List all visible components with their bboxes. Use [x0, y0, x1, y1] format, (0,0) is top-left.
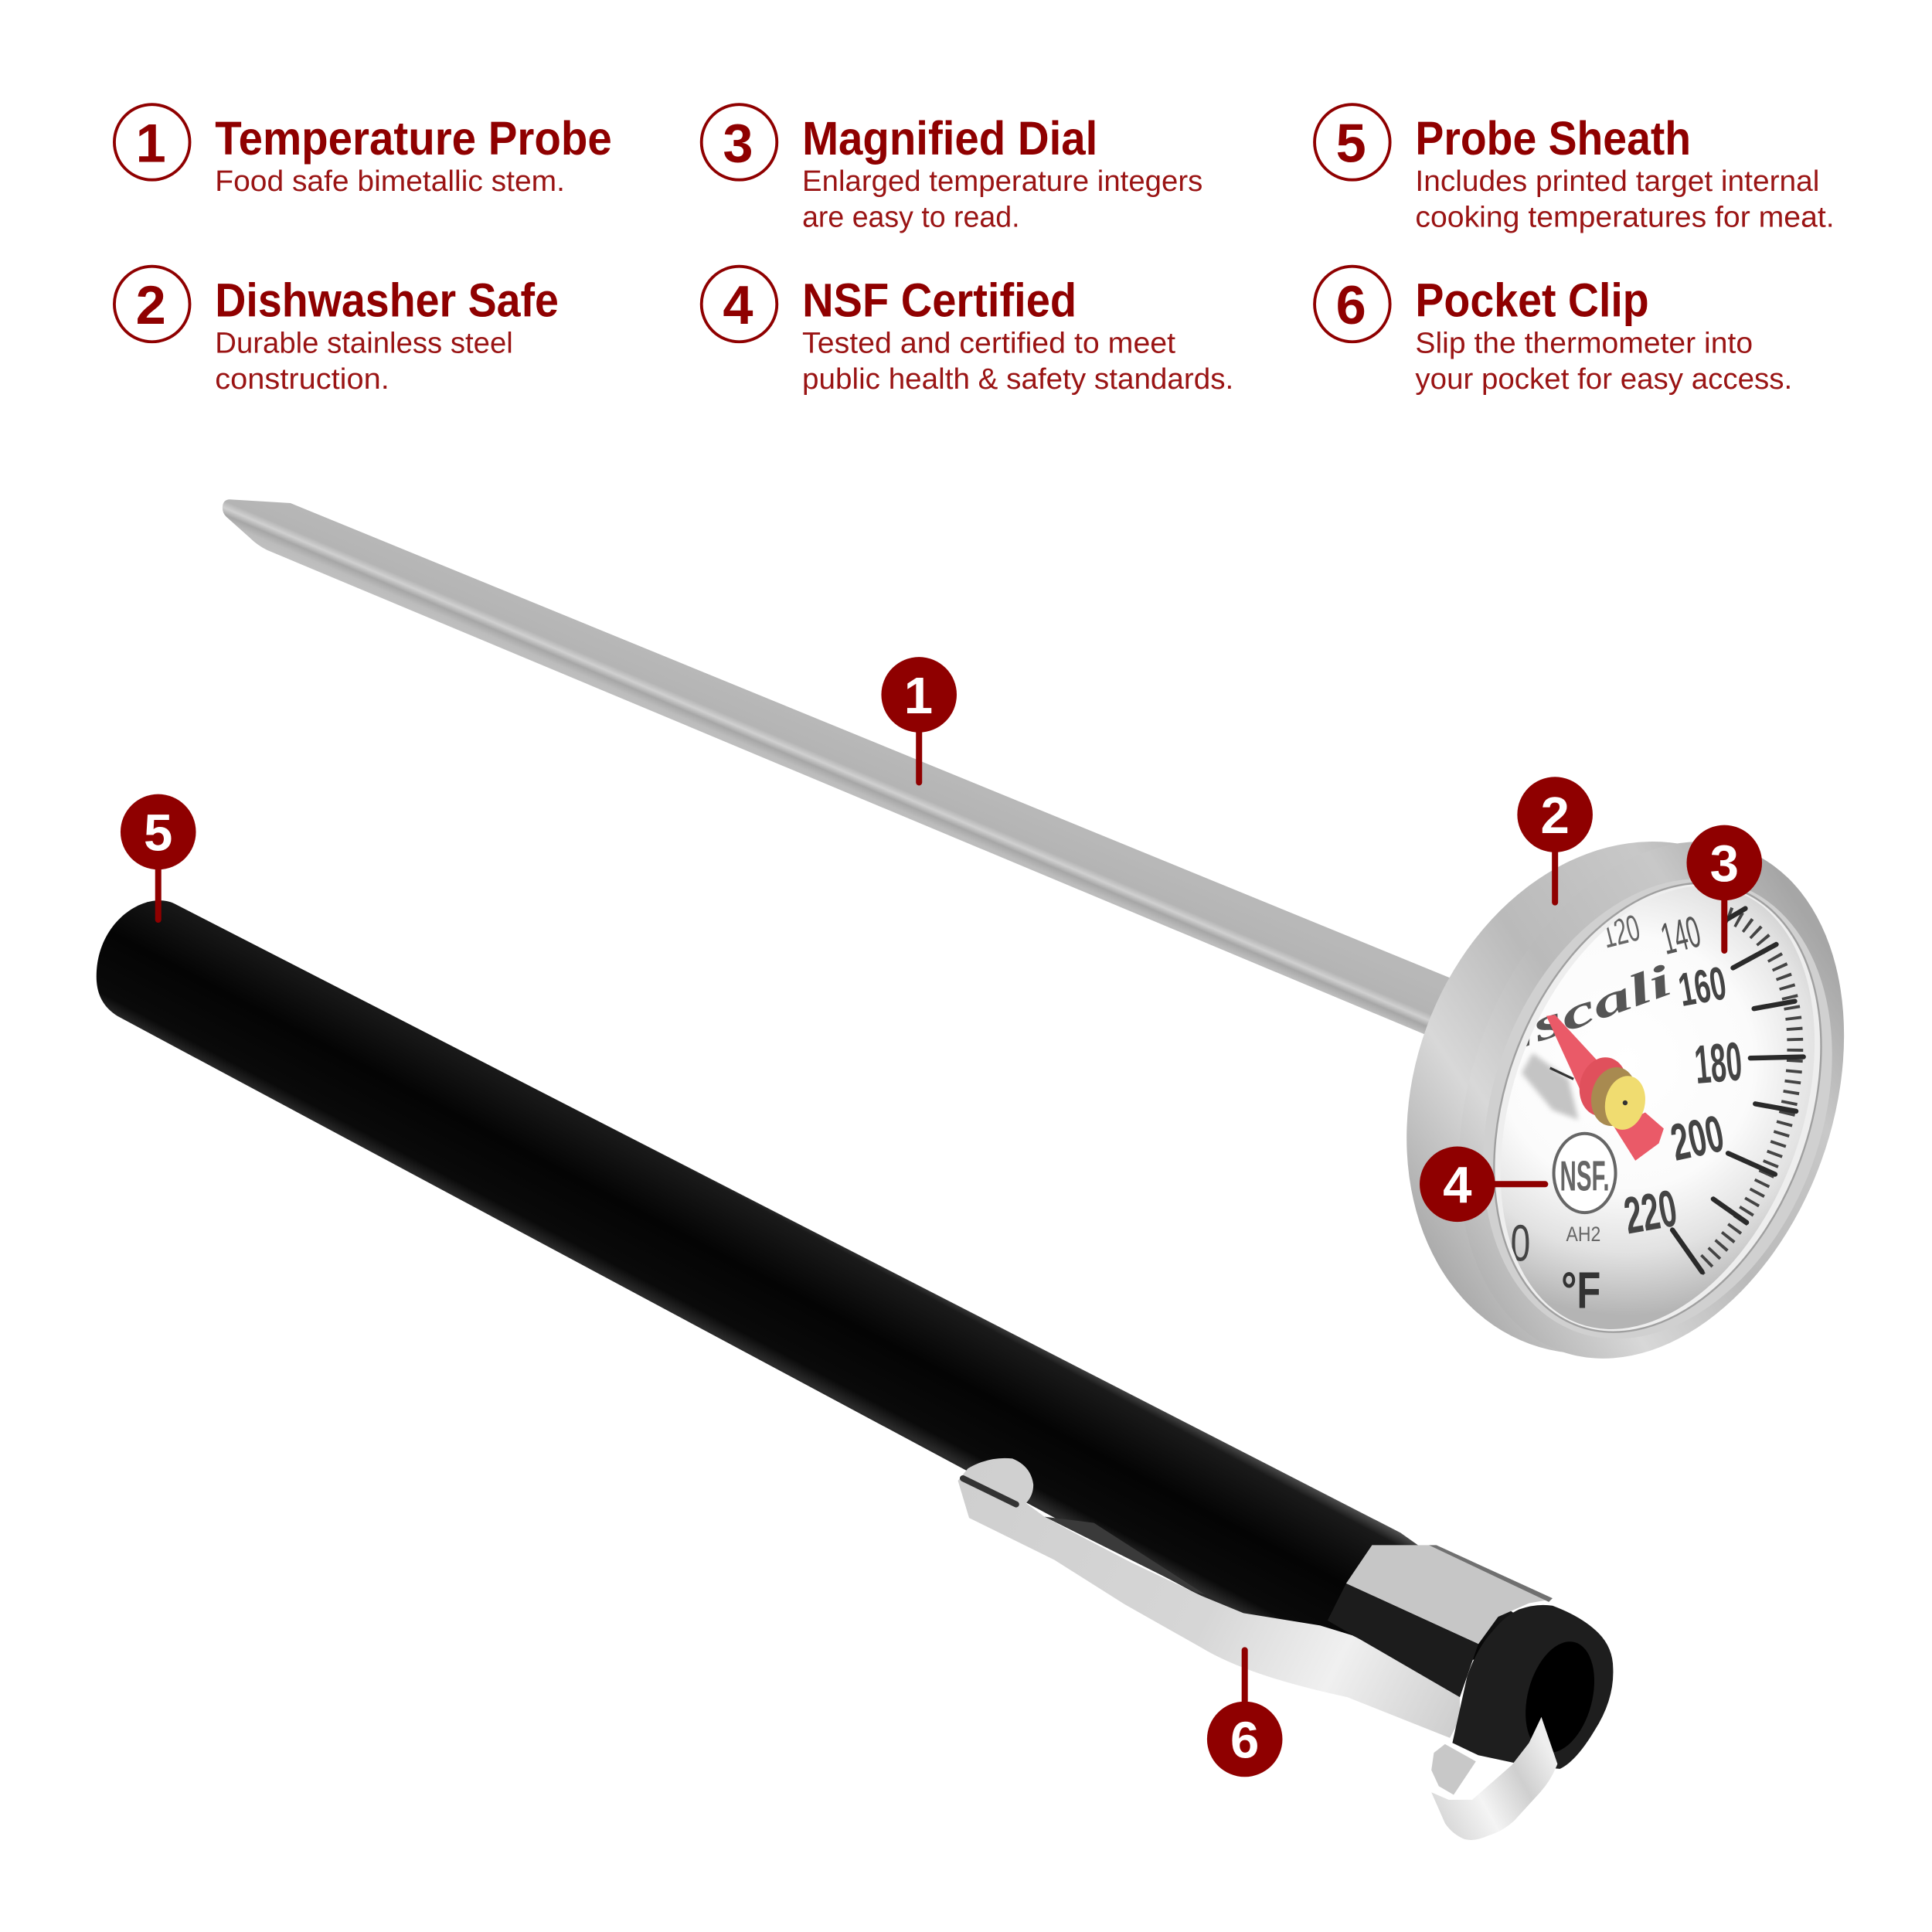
legend item 6: pocket clip: Pocket Clip [1415, 274, 1649, 326]
callout 1: 1 [904, 667, 933, 725]
legend item 5: probe sheath: cooking temperatures for meat. [1415, 201, 1835, 233]
legend item 3: magnified dial: are easy to read. [802, 201, 1020, 233]
callouts [121, 657, 1762, 1777]
callout 1 [881, 657, 957, 782]
probe stem [223, 499, 1464, 1041]
callout 5: 5 [144, 804, 172, 862]
dial numbers: 140 [1656, 907, 1706, 964]
legend item 5: probe sheath [1315, 104, 1835, 233]
callout 4 [1420, 1147, 1545, 1222]
legend item 3: magnified dial: 3 [723, 113, 753, 174]
legend item 2: dishwasher safe: Dishwasher Safe [215, 274, 559, 326]
thermometer: probe and dial [223, 499, 1913, 1414]
legend item 5: probe sheath: 5 [1336, 113, 1366, 174]
dial face [1502, 886, 1815, 1329]
NSF mark: AH2 [1566, 1222, 1600, 1246]
legend item 1: temperature probe [114, 104, 612, 197]
callout 3: 3 [1710, 835, 1739, 893]
dial numbers: °F [1561, 1261, 1600, 1319]
legend item 1: temperature probe: Temperature Probe [215, 112, 612, 165]
legend item 5: probe sheath: Probe Sheath [1415, 112, 1691, 165]
legend item 4: NSF certified [702, 267, 1233, 395]
needle [1546, 1015, 1664, 1161]
probe sheath [97, 900, 1613, 1840]
needle hub [1580, 1057, 1645, 1130]
legend item 2: dishwasher safe: construction. [215, 362, 389, 395]
legend item 3: magnified dial: Magnified Dial [802, 112, 1097, 165]
legend item 4: NSF certified: 4 [723, 274, 753, 335]
dial numbers: 160 [1675, 956, 1730, 1016]
legend item 4: NSF certified: Tested and certified to meet [802, 327, 1176, 359]
dial numbers [1511, 907, 1744, 1319]
legend item 6: pocket clip: your pocket for easy access. [1415, 362, 1792, 395]
needle shaft shadow [1522, 1053, 1579, 1120]
dial numbers: 0 [1511, 1214, 1530, 1272]
legend item 3: magnified dial: Enlarged temperature integers [802, 165, 1202, 197]
legend item 2: dishwasher safe [114, 267, 559, 395]
dial numbers: 120 [1598, 907, 1644, 957]
legend: numbered feature list [114, 104, 1835, 395]
rubber end ring [1452, 1605, 1613, 1769]
dial numbers: 220 [1620, 1179, 1681, 1245]
minor ticks [1692, 907, 1804, 1275]
callout 5 [121, 794, 196, 920]
metal collar [1328, 1545, 1553, 1697]
legend item 1: temperature probe: Food safe bimetallic stem. [215, 165, 565, 197]
legend item 4: NSF certified: NSF Certified [802, 274, 1077, 326]
callout 2: 2 [1540, 787, 1570, 845]
callout 6: 6 [1230, 1711, 1259, 1769]
major ticks [1672, 909, 1804, 1272]
legend item 2: dishwasher safe: 2 [136, 274, 166, 335]
dial numbers: 200 [1666, 1104, 1729, 1172]
callout 2 [1517, 777, 1593, 903]
callout 6 [1207, 1650, 1282, 1777]
legend item 2: dishwasher safe: Durable stainless steel [215, 327, 513, 359]
legend item 6: pocket clip [1315, 267, 1792, 395]
legend item 5: probe sheath: Includes printed target internal [1415, 165, 1819, 197]
callout 3 [1687, 825, 1762, 951]
callout 4: 4 [1443, 1156, 1471, 1214]
legend item 6: pocket clip: Slip the thermometer into [1415, 327, 1753, 359]
brand name: Escali [1476, 956, 1678, 1070]
legend item 1: temperature probe: 1 [136, 113, 166, 174]
NSF mark: NSF. [1560, 1152, 1610, 1199]
dial case [1337, 781, 1913, 1414]
NSF mark [1554, 1134, 1616, 1246]
legend item 4: NSF certified: public health & safety standards. [802, 362, 1233, 395]
dial numbers: 180 [1692, 1030, 1744, 1095]
hanging loop [1431, 1717, 1557, 1840]
legend item 6: pocket clip: 6 [1336, 274, 1366, 335]
black tube [97, 900, 1557, 1681]
legend item 3: magnified dial [702, 104, 1202, 233]
pocket clip [958, 1458, 1460, 1738]
